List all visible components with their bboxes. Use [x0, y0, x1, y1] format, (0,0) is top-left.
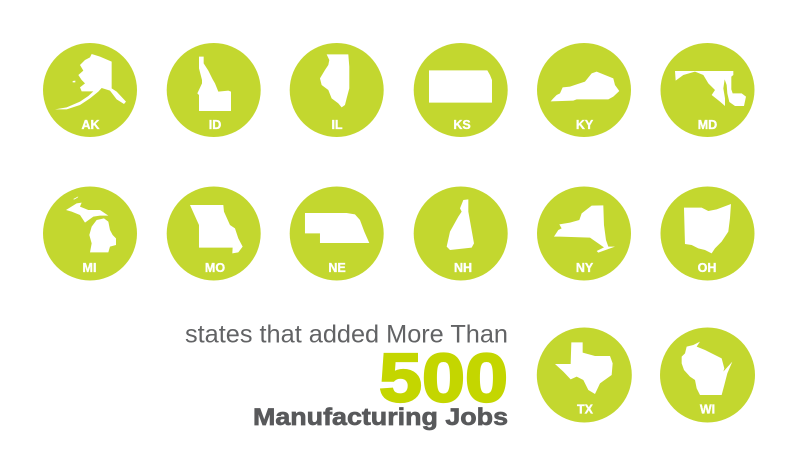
headline: Manufacturing Jobs: Manufacturing Jobs: [253, 404, 508, 431]
badge: NY: [537, 186, 631, 280]
badge: ID: [167, 43, 261, 137]
badge: MI: MI: [83, 261, 96, 275]
headline number: 500: 500: [379, 340, 508, 416]
badge: NH: [414, 186, 508, 280]
badge: OH: OH: [698, 261, 716, 275]
badge: KS: [414, 43, 508, 137]
badge: OH: [660, 186, 754, 280]
badge: MO: [167, 186, 261, 280]
badge: MO: MO: [205, 261, 225, 275]
badge: IL: IL: [331, 118, 343, 132]
badge: NH: NH: [454, 261, 472, 275]
badge: MD: MD: [698, 118, 717, 132]
badge: TX: TX: [577, 402, 594, 416]
badge: KY: [537, 43, 631, 137]
badge: KY: KY: [576, 118, 594, 132]
badge: MI: [43, 186, 137, 280]
badge: NE: NE: [328, 261, 346, 275]
badge: AK: [43, 43, 137, 137]
badge: AK: AK: [81, 118, 100, 132]
badge: KS: KS: [453, 118, 471, 132]
badge: WI: [660, 328, 755, 422]
badge: TX: [537, 328, 632, 422]
headline text: [185, 320, 508, 431]
badge: MD: [660, 43, 754, 137]
badge: IL: [290, 43, 384, 137]
badge: ID: ID: [209, 118, 221, 132]
badge: WI: WI: [700, 402, 715, 416]
badge: NY: NY: [576, 261, 594, 275]
headline: states that added More Than: states that added More Than: [185, 320, 508, 348]
badge: NE: [290, 186, 384, 280]
